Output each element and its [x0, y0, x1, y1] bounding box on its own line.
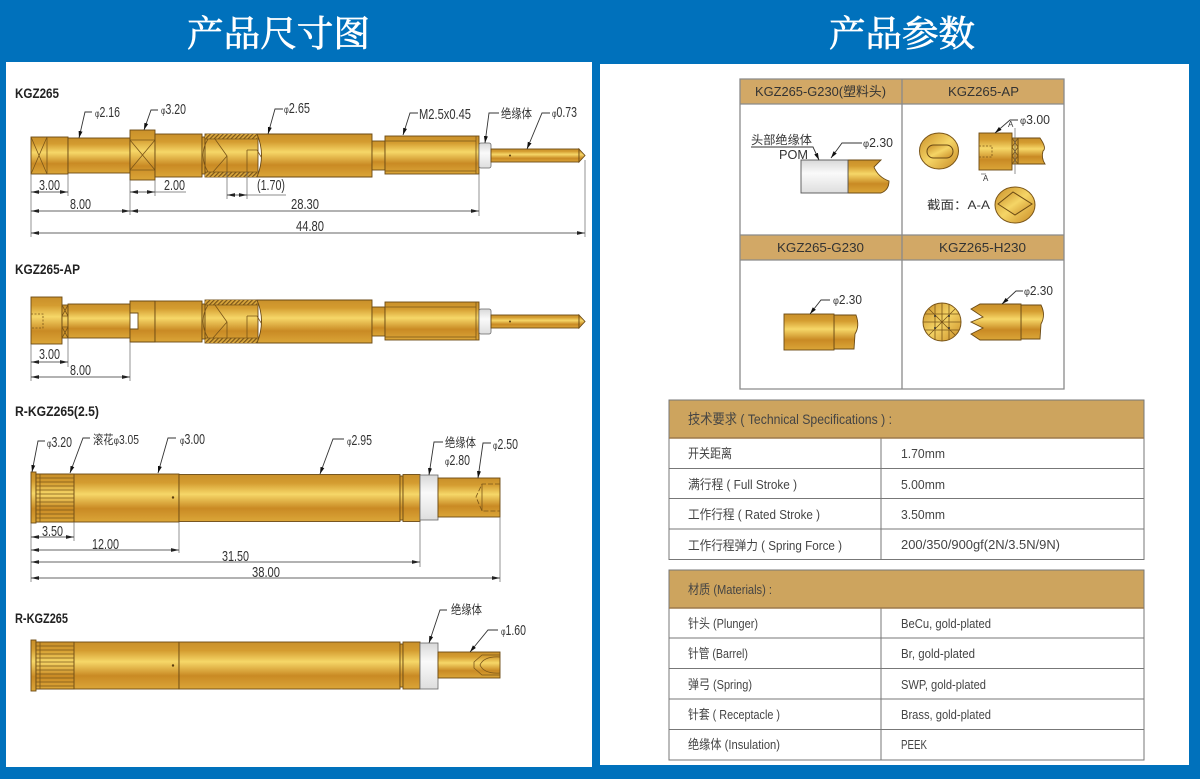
tip names: KGZ265-H230 [939, 240, 1026, 255]
pin body: KGZ265-AP [31, 297, 585, 344]
tip drawing: H230: φ2.30 [1024, 283, 1053, 298]
pin body: KGZ265 [31, 130, 585, 180]
receptacle body: R-KGZ265(2.5) [31, 472, 500, 523]
materials text: 针管 (Barrel) [688, 646, 748, 661]
drawing: R-KGZ265 [15, 602, 526, 691]
tip drawing: G230 [784, 292, 862, 350]
materials text: PEEK [901, 737, 927, 752]
specifications frame [669, 400, 1144, 560]
dimensions: KGZ265-AP [31, 338, 130, 381]
tip drawing: G230: φ2.30 [833, 292, 862, 307]
table: tip options [740, 79, 1064, 389]
materials frame [669, 570, 1144, 760]
dimensions: R-KGZ265(2.5) [31, 517, 500, 582]
specifications text: 开关距离 [688, 446, 732, 461]
leaders: KGZ265: φ2.16 [95, 104, 120, 121]
materials text: BeCu, gold-plated [901, 616, 991, 631]
tip drawing: G230 plastic head [751, 132, 893, 193]
specifications text: 满行程 ( Full Stroke ) [688, 477, 797, 492]
specifications text: 工作行程 ( Rated Stroke ) [688, 507, 820, 522]
dimensions: R-KGZ265(2.5): 12.00 [92, 536, 119, 553]
panel: parameters [600, 64, 1189, 765]
dimensions: KGZ265: (1.70) [257, 177, 285, 194]
dimensions: KGZ265 [31, 160, 585, 237]
table: materials [669, 570, 1144, 760]
tip names: KGZ265-G230(塑料头) [755, 84, 886, 99]
tip drawing: AP: A [983, 174, 989, 183]
specifications text: 3.50mm [901, 507, 945, 522]
dimensions: KGZ265: 3.00 [39, 177, 60, 194]
materials text: 针头 (Plunger) [688, 616, 758, 631]
leaders: R-KGZ265 [429, 602, 526, 652]
leaders: R-KGZ265(2.5): φ2.50 [493, 436, 518, 453]
materials text: 材质 (Materials) : [688, 582, 772, 597]
receptacle body: R-KGZ265 [31, 640, 500, 691]
label: KGZ265-AP: KGZ265-AP [15, 262, 80, 277]
label: R-KGZ265: R-KGZ265 [15, 611, 68, 626]
drawing: KGZ265 [15, 86, 585, 237]
specifications text: 200/350/900gf(2N/3.5N/9N) [901, 537, 1060, 552]
tip drawing: H230 [923, 283, 1053, 341]
leaders: R-KGZ265(2.5): φ3.00 [180, 431, 205, 448]
dimensions: KGZ265: 8.00 [70, 196, 91, 213]
tip drawing: AP [920, 112, 1050, 223]
panel: dimension drawings [6, 62, 592, 767]
tip drawing: G230 plastic head: φ2.30 [863, 135, 893, 150]
leaders: R-KGZ265: 绝缘体 [451, 602, 482, 617]
specifications text: 1.70mm [901, 446, 945, 461]
specifications header [669, 400, 1144, 438]
dimensions: KGZ265: 28.30 [291, 196, 319, 213]
tip names: KGZ265-AP [948, 84, 1019, 99]
tip header row two [740, 235, 1064, 260]
label: KGZ265: KGZ265 [15, 86, 59, 101]
table: technical specifications [669, 400, 1144, 560]
tip drawing: G230 plastic head: 头部绝缘体 [751, 132, 812, 147]
tip drawing: G230 plastic head: POM [779, 147, 808, 162]
dimensions: R-KGZ265(2.5): 3.50 [42, 523, 63, 540]
materials text [688, 582, 991, 752]
materials header [669, 570, 1144, 608]
title: product dimension drawing: 产品尺寸图 [187, 14, 370, 54]
tip drawing: AP: A [1008, 120, 1014, 129]
leaders: KGZ265: M2.5x0.45 [419, 106, 471, 123]
materials text: Brass, gold-plated [901, 707, 991, 722]
leaders: KGZ265: 绝缘体 [501, 106, 532, 121]
dimensions: R-KGZ265(2.5): 38.00 [252, 564, 280, 581]
tip names: KGZ265-G230 [777, 240, 864, 255]
leaders: KGZ265: φ2.65 [284, 100, 310, 117]
leaders: R-KGZ265(2.5): φ2.95 [347, 432, 372, 449]
specifications text: 工作行程弹力 ( Spring Force ) [688, 538, 842, 553]
materials text: 针套 ( Receptacle ) [688, 707, 780, 722]
materials text: 绝缘体 (Insulation) [688, 737, 780, 752]
tip drawing: AP: φ3.00 [1020, 112, 1050, 127]
tip header row one [740, 79, 1064, 104]
specifications text: 5.00mm [901, 477, 945, 492]
leaders: R-KGZ265(2.5): 滚花φ3.05 [93, 432, 139, 447]
leaders: KGZ265: φ3.20 [161, 101, 186, 118]
leaders: KGZ265 [79, 100, 577, 149]
table frame [740, 79, 1064, 389]
tip drawing: AP: 截面：A-A [927, 198, 990, 212]
materials text: 弹弓 (Spring) [688, 677, 752, 692]
leaders: R-KGZ265: φ1.60 [501, 622, 526, 639]
dimensions: R-KGZ265(2.5): 31.50 [222, 548, 249, 565]
leaders: R-KGZ265(2.5): 绝缘体 [445, 435, 476, 450]
leaders: R-KGZ265(2.5): φ2.80 [445, 452, 470, 469]
title: product parameters: 产品参数 [829, 14, 975, 54]
drawing: R-KGZ265(2.5) [15, 404, 518, 582]
materials text: SWP, gold-plated [901, 677, 986, 692]
leaders: R-KGZ265(2.5) [32, 431, 518, 478]
leaders: KGZ265: φ0.73 [552, 104, 577, 121]
dimensions: KGZ265: 44.80 [296, 218, 324, 235]
specifications text [688, 411, 1060, 553]
specifications text: 技术要求 ( Technical Specifications ) : [688, 411, 892, 427]
drawing: KGZ265-AP [15, 262, 585, 381]
tip names [755, 84, 1026, 255]
dimensions: KGZ265: 2.00 [164, 177, 185, 194]
dimensions: KGZ265-AP: 8.00 [70, 362, 91, 379]
materials text: Br, gold-plated [901, 646, 975, 661]
label: R-KGZ265(2.5): R-KGZ265(2.5) [15, 404, 99, 419]
leaders: R-KGZ265(2.5): φ3.20 [47, 434, 72, 451]
dimensions: KGZ265-AP: 3.00 [39, 346, 60, 363]
